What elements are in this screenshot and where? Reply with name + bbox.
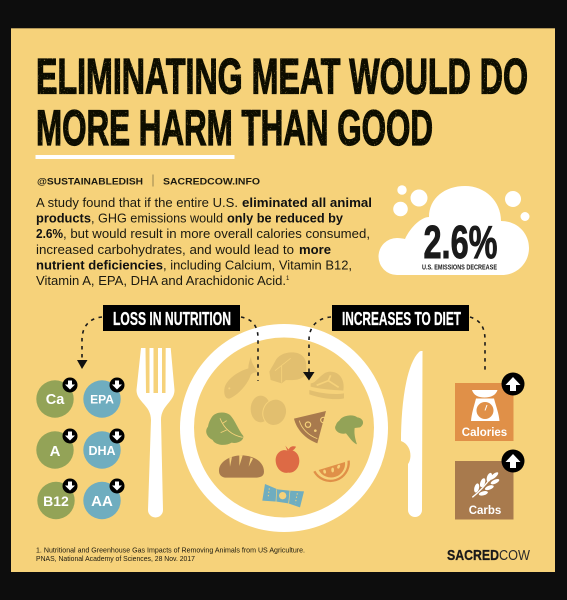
intro text block xyxy=(36,195,372,288)
intro text block: 2.6% xyxy=(36,226,63,241)
foods on the plate xyxy=(206,352,363,507)
up arrow badges xyxy=(502,372,524,472)
arrow: plate to loss heading xyxy=(241,317,258,381)
down arrow badges xyxy=(62,378,124,494)
arrow: loss to nutrient circles xyxy=(77,317,102,369)
heading: increases to diet: INCREASES TO DIET xyxy=(342,309,461,329)
nutrient: DHA: DHA xyxy=(88,444,116,458)
intro text block: Vitamin A, EPA, DHA and Arachidonic Acid. xyxy=(36,273,286,288)
footnote: 1. Nutritional and Greenhouse Gas Impacts of Removing Animals from US Agriculture. xyxy=(36,546,305,554)
icon: eggs (faded) xyxy=(251,396,290,429)
footnote xyxy=(36,546,305,563)
title xyxy=(36,48,528,156)
title underline xyxy=(36,155,234,159)
carbs tile xyxy=(455,461,514,520)
fork xyxy=(136,348,174,518)
intro text block: more xyxy=(299,242,331,257)
intro text block: only be reduced by xyxy=(227,210,344,226)
icon: cheese (faded) xyxy=(269,352,306,383)
arrow: increases heading to square icons xyxy=(470,317,485,373)
calories label: Calories xyxy=(462,427,507,439)
icon: apple xyxy=(276,446,299,473)
icon: pasta bow xyxy=(262,484,304,507)
intro text block: nutrient deficiencies xyxy=(36,258,163,272)
icon: bread loaf xyxy=(219,455,264,478)
icon: orange slice xyxy=(314,461,349,481)
arrow: increases heading to plate xyxy=(303,317,331,380)
icon: fish (faded) xyxy=(224,357,258,399)
social handles: @SUSTAINABLEDISH xyxy=(37,177,143,188)
heading: loss in nutrition: LOSS IN NUTRITION xyxy=(113,309,231,329)
cloud caption: U.S. EMISSIONS DECREASE xyxy=(422,262,497,272)
plate xyxy=(180,324,388,532)
intro text block: increased carbohydrates, and would lead to xyxy=(36,242,294,257)
icon: broccoli xyxy=(335,415,363,444)
nutrient: vitamin A: A xyxy=(50,443,61,460)
logo: Sacred Cow: COW xyxy=(499,547,531,564)
icon: pizza slice xyxy=(294,411,326,443)
knife xyxy=(401,351,423,517)
intro text block: , including Calcium, Vitamin B12, xyxy=(163,258,352,272)
heading: increases to diet xyxy=(332,305,469,331)
intro text block: A study found that if the entire U.S. xyxy=(36,195,238,210)
cloud bubbles xyxy=(393,185,530,221)
icon: kitchen scale xyxy=(471,390,500,421)
intro text block: eliminated all animal xyxy=(242,195,372,210)
big number: 2.6% xyxy=(424,216,498,268)
intro text block: , but would result in more overall calories consumed, xyxy=(63,226,370,241)
logo: Sacred Cow: SACRED xyxy=(447,547,499,564)
intro text block: , GHG emissions would xyxy=(91,210,223,226)
social handles xyxy=(37,174,261,188)
calories tile xyxy=(455,383,514,441)
nutrient circles xyxy=(36,380,121,519)
icon: steak (faded) xyxy=(309,372,344,399)
icon: wheat xyxy=(472,471,500,497)
cloud callout: 2.6% emissions decrease xyxy=(378,185,530,275)
nutrient: AA: AA xyxy=(91,493,113,510)
cloud shape xyxy=(378,186,529,275)
intro text block: 1 xyxy=(286,276,290,282)
icon: lettuce xyxy=(206,412,243,445)
nutrient: EPA: EPA xyxy=(90,392,114,406)
carbs label: Carbs xyxy=(469,505,501,517)
intro text block: products xyxy=(36,210,91,226)
social handles: SACREDCOW.INFO xyxy=(163,177,261,188)
nutrient: calcium: Ca xyxy=(46,392,65,408)
heading: loss in nutrition xyxy=(103,305,240,331)
nutrient: B12: B12 xyxy=(43,493,69,509)
footnote: PNAS, National Academy of Sciences, 28 Nov. 2017 xyxy=(36,554,195,563)
